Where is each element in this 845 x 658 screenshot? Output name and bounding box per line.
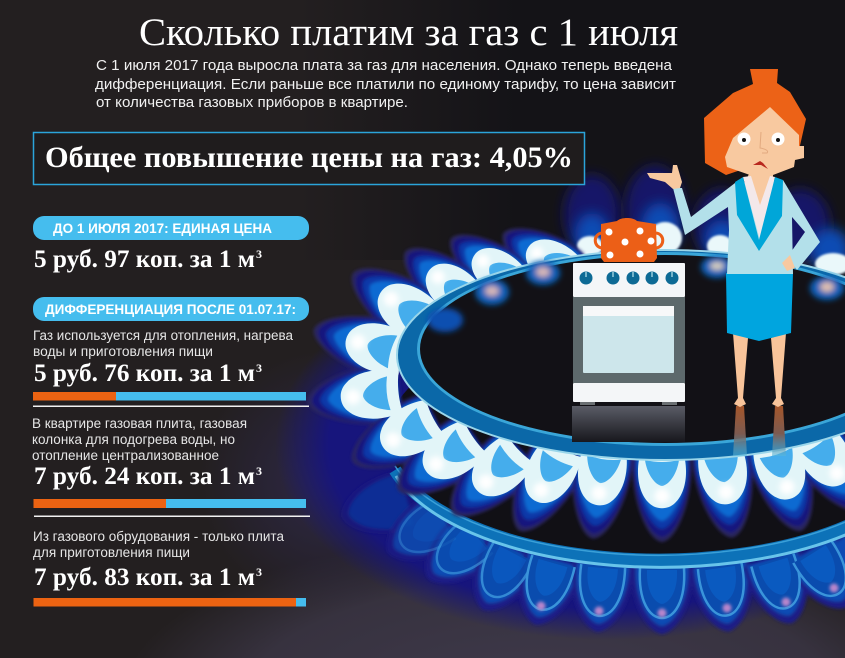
stove reflection	[572, 406, 685, 442]
legs	[733, 333, 748, 407]
tariff 2 description: В квартире газовая плита, газовая	[32, 416, 247, 431]
pill heading: differentiation: ДИФФЕРЕНЦИАЦИЯ ПОСЛЕ 01.07.17:	[45, 301, 296, 317]
tariff 1 description: Газ используется для отопления, нагрева	[33, 328, 293, 343]
lower burner ring	[390, 388, 845, 569]
hair	[704, 69, 806, 175]
upper burner ring	[397, 250, 845, 460]
tariff 2 description: колонка для подогрева воды, но	[32, 432, 235, 447]
nose	[760, 132, 768, 153]
title: Сколько платим за газ с 1 июля	[139, 11, 678, 54]
tariff 2 price: 7 руб. 24 коп. за 1 м	[34, 463, 255, 490]
tariff 2 description	[32, 416, 247, 463]
top flames behind the ring	[564, 166, 845, 275]
intro text: от количества газовых приборов в квартире.	[96, 95, 408, 111]
jacket and arms	[673, 180, 820, 274]
intro text: С 1 июля 2017 года выросла плата за газ для населения. Однако теперь введена	[96, 58, 673, 74]
icon: gas stove	[572, 263, 685, 442]
pill heading: differentiation	[33, 297, 309, 321]
face	[725, 107, 804, 175]
tariff 2 description: отопление централизованное	[32, 448, 219, 463]
tariff 1 block	[33, 328, 306, 400]
tariff 2 block	[32, 416, 306, 508]
illustration: woman	[647, 69, 820, 456]
upper gas burner flames	[304, 212, 845, 544]
icon: polka-dot pot	[595, 218, 663, 262]
callout: total price increase	[34, 132, 584, 184]
stove knobs	[580, 272, 678, 284]
tariff 3 description: Из газового обрудования - только плита	[33, 529, 284, 544]
stove body	[580, 401, 595, 405]
neck	[747, 172, 773, 208]
pointing hand	[647, 165, 682, 189]
tariff 1 price: 5 руб. 76 коп. за 1 м	[34, 360, 255, 387]
tariff 2 price: 3	[256, 464, 262, 478]
hand on hip	[782, 255, 795, 271]
tariff 1 description	[33, 328, 293, 359]
tariff 3 block	[33, 529, 306, 606]
pill heading: before July 1: ДО 1 ИЮЛЯ 2017: ЕДИНАЯ ЦЕНА	[53, 220, 272, 236]
intro text	[95, 58, 676, 111]
pill heading: before July 1	[33, 216, 309, 240]
tariff 1 bar	[33, 392, 306, 400]
tariff 3 price: 7 руб. 83 коп. за 1 м	[34, 564, 255, 591]
tariff 3 price: 3	[256, 565, 262, 579]
tariff 3 description	[33, 529, 284, 560]
price: single tariff: 5 руб. 97 коп. за 1 м	[34, 246, 255, 273]
tariff 3 description: для приготовления пищи	[33, 545, 190, 560]
flame reflections inside the ring	[427, 256, 844, 332]
price: single tariff: 3	[256, 247, 262, 261]
tariff 1 price: 3	[256, 361, 262, 375]
tariff 3 bar	[34, 598, 306, 606]
callout: total price increase: Общее повышение цены на газ: 4,05%	[45, 141, 573, 174]
lapels	[735, 177, 783, 251]
shirt	[743, 176, 775, 240]
tariff 1 description: воды и приготовления пищи	[33, 344, 213, 359]
leg reflections	[733, 406, 747, 456]
tariff 2 bar	[34, 499, 306, 508]
intro text: дифференциация. Если раньше все платили по единому тарифу, то цена зависит	[95, 77, 676, 93]
skirt	[726, 273, 793, 341]
lower gas burner flames	[333, 470, 845, 636]
eyes	[738, 132, 750, 146]
mouth	[753, 161, 768, 169]
